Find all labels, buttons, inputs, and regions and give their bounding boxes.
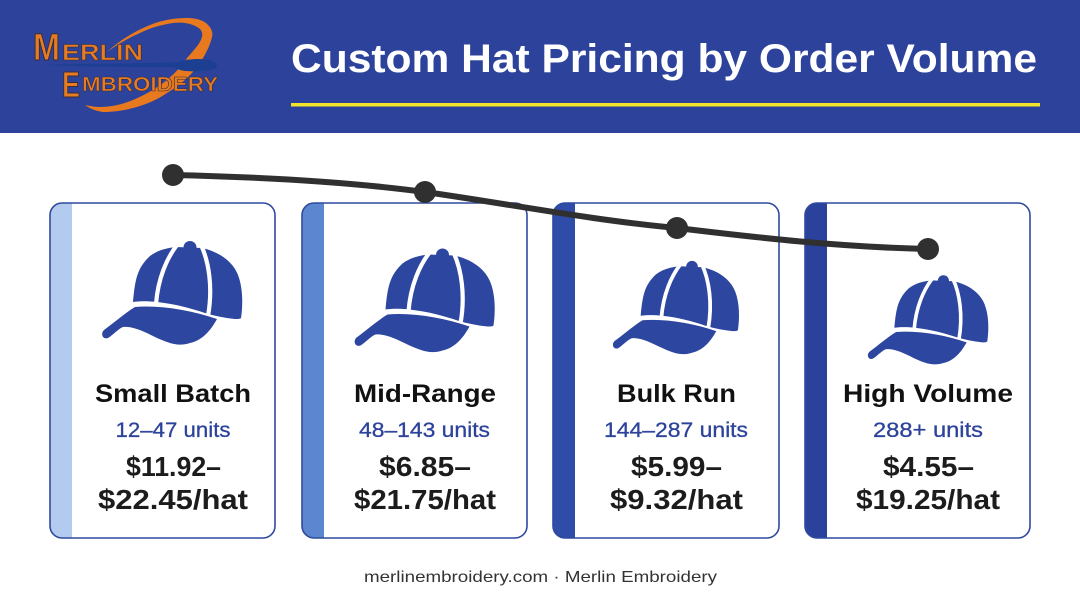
- header band: [0, 0, 1080, 133]
- label: Bulk Run: [617, 380, 736, 408]
- units: 288+ units: [873, 419, 983, 442]
- units: 48–143 units: [359, 419, 490, 442]
- panel: Mid-Range: [302, 203, 527, 538]
- label: High Volume: [843, 380, 1013, 408]
- icon: cap: [868, 275, 988, 364]
- icon: cap: [102, 241, 242, 345]
- units: 12–47 units: [116, 419, 230, 442]
- logo: Merlin Embroidery: E: [62, 64, 80, 105]
- price: $5.99–: [631, 451, 722, 482]
- price: $11.92–: [126, 451, 221, 482]
- logo: Merlin Embroidery: M: [33, 27, 60, 69]
- label: Small Batch: [95, 380, 251, 408]
- units: 144–287 units: [604, 419, 748, 442]
- panel: Small Batch: [50, 203, 275, 538]
- price line 2: $19.25/hat: [856, 484, 1000, 515]
- price trend line: [162, 164, 939, 260]
- price line 2: $9.32/hat: [610, 484, 743, 515]
- logo: Merlin Embroidery: [33, 18, 219, 112]
- panel: High Volume: [805, 203, 1030, 538]
- logo: Merlin Embroidery: MBROIDERY: [82, 74, 219, 96]
- icon: cap: [355, 248, 495, 352]
- price line 2: $21.75/hat: [354, 484, 496, 515]
- label: Mid-Range: [354, 380, 496, 408]
- price: $4.55–: [883, 451, 974, 482]
- price: $6.85–: [379, 451, 471, 482]
- footer: merlinembroidery.com · Merlin Embroidery: [364, 569, 717, 586]
- title: Custom Hat Pricing by Order Volume: [291, 37, 1037, 81]
- icon: cap: [613, 261, 739, 354]
- logo: Merlin Embroidery: ERLIN: [62, 40, 143, 65]
- panel: Bulk Run: [553, 203, 779, 538]
- price line 2: $22.45/hat: [98, 484, 248, 515]
- title underline: [291, 103, 1040, 106]
